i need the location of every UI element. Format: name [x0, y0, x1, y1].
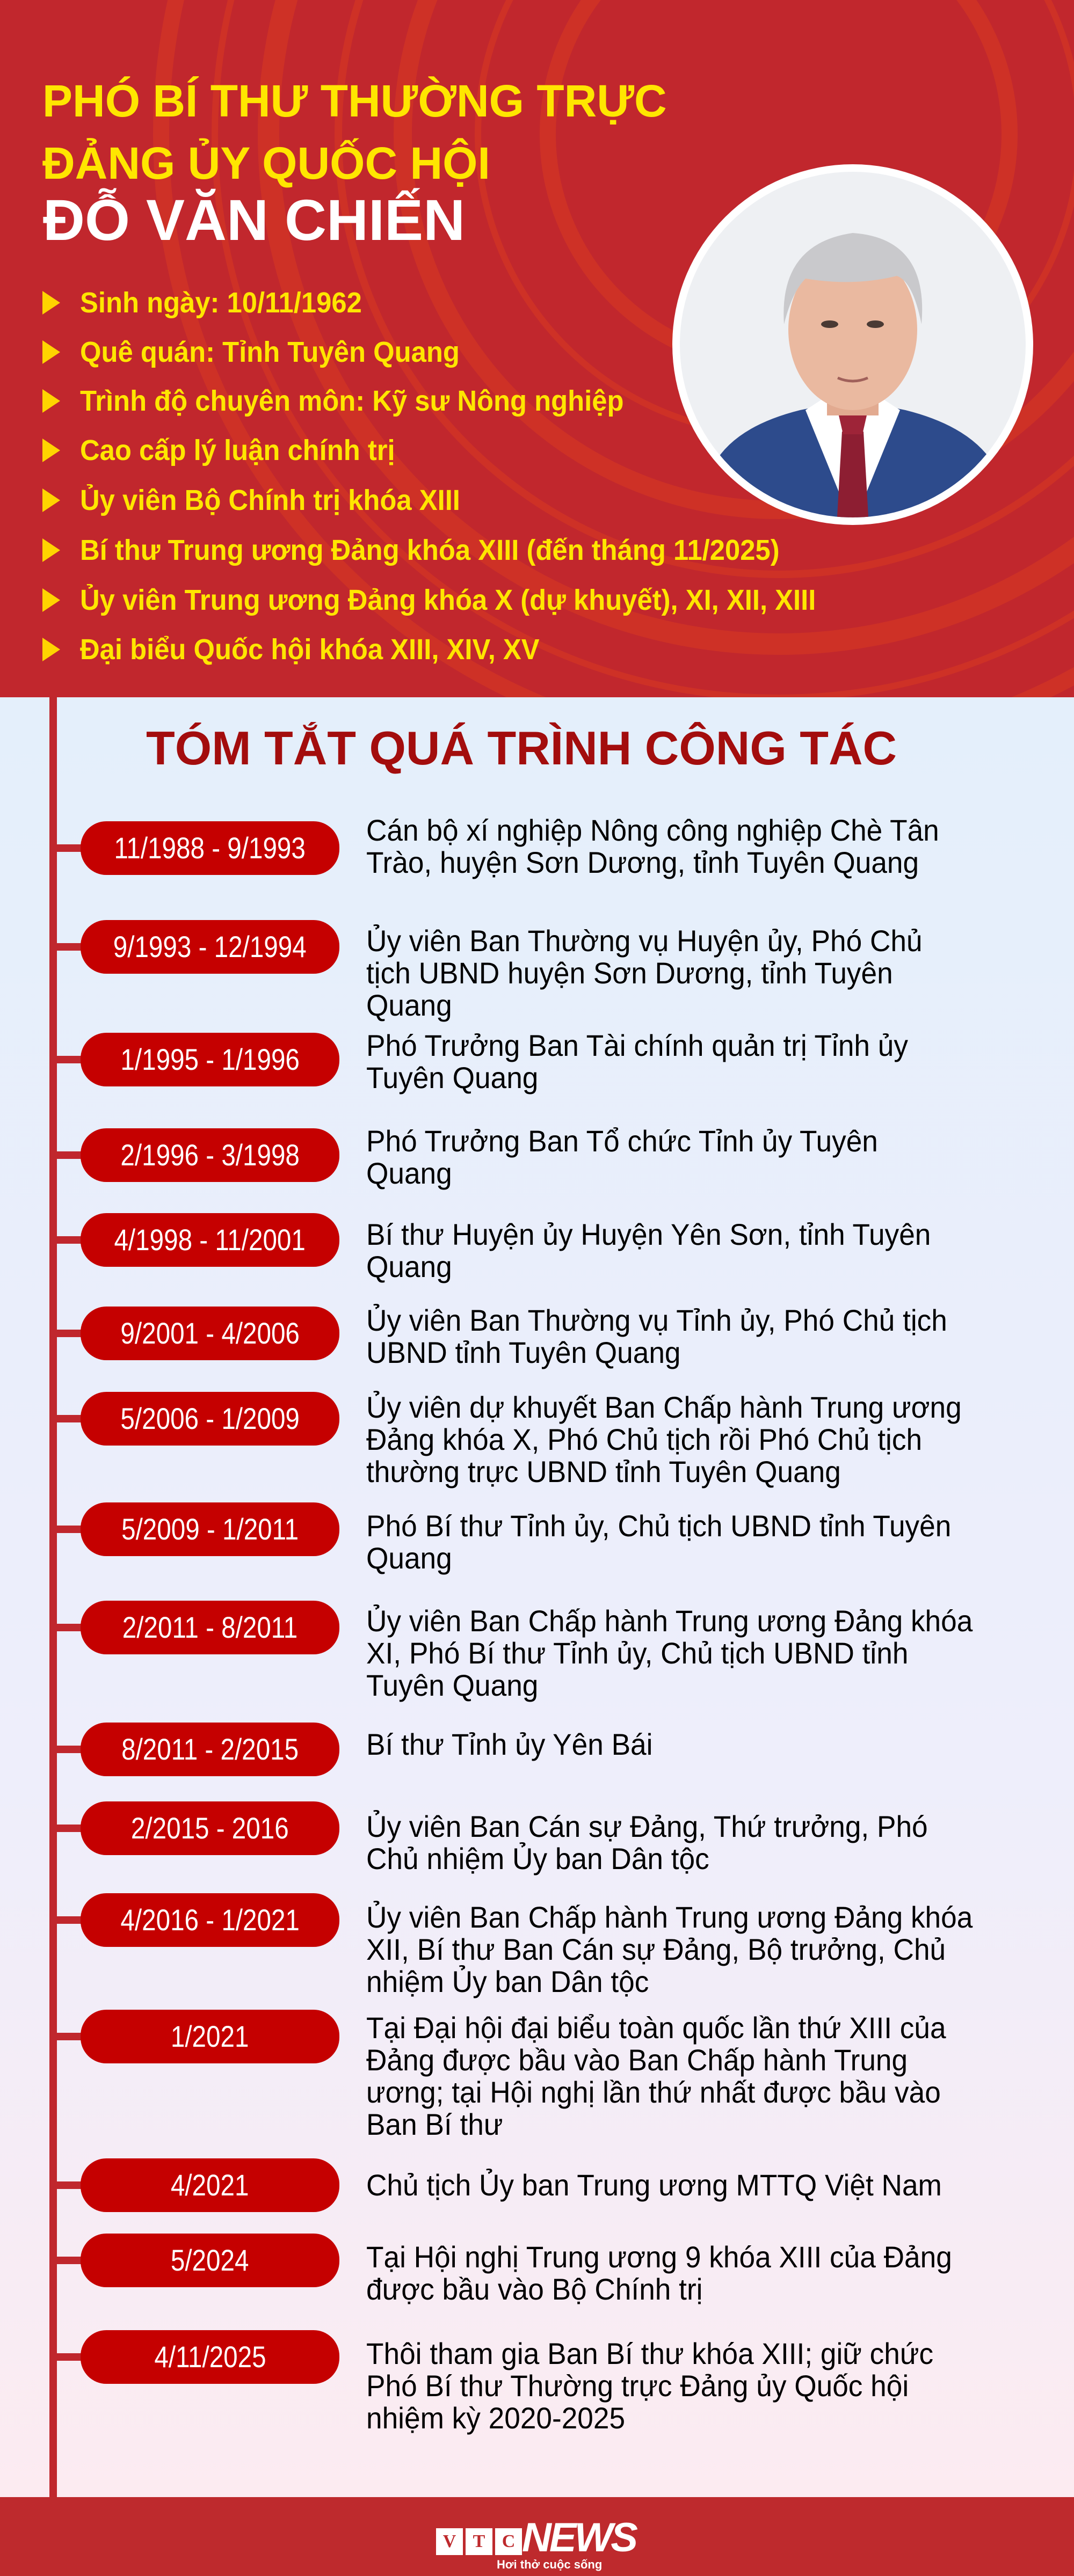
item 1: [57, 813, 939, 879]
item 4: [57, 1124, 878, 1190]
logo: VTC News: T: [473, 2531, 485, 2551]
title: ĐẢNG ỦY QUỐC HỘI: [42, 138, 490, 188]
bullet list: Cao cấp lý luận chính trị: [80, 434, 395, 466]
bullet list: Ủy viên Trung ương Đảng khóa X (dự khuyết), XI, XII, XIII: [80, 584, 816, 616]
header panel: [0, 0, 1074, 697]
logo: VTC News: Hơi thở cuộc sống: [497, 2558, 602, 2571]
item 8: Quang: [366, 1541, 452, 1575]
logo: VTC News: V: [443, 2531, 456, 2551]
item 15: được bầu vào Bộ Chính trị: [366, 2272, 702, 2306]
item 5: [57, 1213, 931, 1283]
item 10: [57, 1723, 652, 1776]
item 15: 5/2024: [171, 2243, 249, 2277]
item 6: Ủy viên Ban Thường vụ Tỉnh ủy, Phó Chủ tịch: [366, 1303, 947, 1337]
item 9: XI, Phó Bí thư Tỉnh ủy, Chủ tịch UBND tỉnh: [366, 1636, 908, 1670]
bullet list: Sinh ngày: 10/11/1962: [80, 287, 362, 319]
item 16: Phó Bí thư Thường trực Đảng ủy Quốc hội: [366, 2369, 909, 2403]
logo: VTC News: NEWS: [522, 2515, 636, 2560]
title: [42, 76, 667, 188]
item 2: Ủy viên Ban Thường vụ Huyện ủy, Phó Chủ: [366, 924, 923, 958]
item 9: 2/2011 - 8/2011: [122, 1610, 297, 1644]
item 8: [57, 1502, 951, 1575]
item 12: XII, Bí thư Ban Cán sự Đảng, Bộ trưởng, Chủ: [366, 1932, 946, 1966]
item 2: 9/1993 - 12/1994: [113, 930, 307, 964]
item 4: Phó Trưởng Ban Tổ chức Tỉnh ủy Tuyên: [366, 1124, 878, 1158]
item 5: 4/1998 - 11/2001: [114, 1223, 306, 1257]
title: PHÓ BÍ THƯ THƯỜNG TRỰC: [42, 76, 667, 126]
item 11: 2/2015 - 2016: [131, 1811, 289, 1845]
item 1: Cán bộ xí nghiệp Nông công nghiệp Chè Tân: [366, 813, 939, 847]
item 13: Tại Đại hội đại biểu toàn quốc lần thứ XIII của: [366, 2011, 946, 2045]
item 11: [57, 1801, 928, 1876]
item 4: 2/1996 - 3/1998: [120, 1138, 300, 1172]
bullet list: [42, 287, 816, 666]
item 15: [57, 2234, 952, 2306]
item 6: UBND tỉnh Tuyên Quang: [366, 1336, 681, 1369]
item 12: [57, 1893, 973, 1998]
item 14: Chủ tịch Ủy ban Trung ương MTTQ Việt Nam: [366, 2168, 942, 2202]
item 14: [57, 2158, 942, 2212]
item 13: Ban Bí thư: [366, 2107, 503, 2141]
item 13: 1/2021: [171, 2019, 249, 2053]
logo: VTC News: [436, 2515, 638, 2571]
item 9: Tuyên Quang: [366, 1668, 538, 1702]
item 16: [57, 2330, 933, 2435]
item 12: nhiệm Ủy ban Dân tộc: [366, 1965, 649, 1998]
timeline axis: [49, 697, 57, 2497]
item 3: [57, 1028, 908, 1094]
item 10: Bí thư Tỉnh ủy Yên Bái: [366, 1727, 652, 1761]
item 11: Ủy viên Ban Cán sự Đảng, Thứ trưởng, Phó: [366, 1809, 928, 1843]
item 6: 9/2001 - 4/2006: [120, 1316, 300, 1350]
item 14: 4/2021: [171, 2168, 249, 2202]
portrait: [672, 164, 1033, 525]
logo: VTC News: C: [502, 2531, 515, 2551]
item 2: [57, 920, 923, 1022]
item 12: 4/2016 - 1/2021: [120, 1903, 300, 1937]
item 7: [57, 1390, 962, 1488]
item 6: [57, 1303, 947, 1369]
item 16: Thôi tham gia Ban Bí thư khóa XIII; giữ chức: [366, 2337, 933, 2370]
item 5: Quang: [366, 1250, 452, 1283]
item 16: nhiệm kỳ 2020-2025: [366, 2401, 625, 2435]
item 7: thường trực UBND tỉnh Tuyên Quang: [366, 1455, 841, 1488]
item 3: Tuyên Quang: [366, 1061, 538, 1094]
item 13: ương; tại Hội nghị lần thứ nhất được bầu vào: [366, 2075, 941, 2109]
item 7: 5/2006 - 1/2009: [120, 1402, 300, 1435]
item 2: tịch UBND huyện Sơn Dương, tỉnh Tuyên: [366, 956, 893, 990]
item 10: 8/2011 - 2/2015: [121, 1732, 299, 1766]
item 5: Bí thư Huyện ủy Huyện Yên Sơn, tỉnh Tuyên: [366, 1217, 931, 1251]
item 4: Quang: [366, 1156, 452, 1190]
item 16: 4/11/2025: [154, 2340, 266, 2374]
bullet list: Ủy viên Bộ Chính trị khóa XIII: [80, 484, 460, 516]
item 12: Ủy viên Ban Chấp hành Trung ương Đảng khóa: [366, 1900, 973, 1934]
item 9: Ủy viên Ban Chấp hành Trung ương Đảng khóa: [366, 1604, 973, 1638]
item 3: 1/1995 - 1/1996: [120, 1042, 300, 1076]
bullet list: Đại biểu Quốc hội khóa XIII, XIV, XV: [80, 633, 540, 666]
item 7: Ủy viên dự khuyết Ban Chấp hành Trung ương: [366, 1390, 962, 1424]
item 7: Đảng khóa X, Phó Chủ tịch rồi Phó Chủ tịch: [366, 1422, 922, 1456]
timeline heading: TÓM TẮT QUÁ TRÌNH CÔNG TÁC: [146, 721, 897, 775]
footer: [0, 2497, 1074, 2576]
item 3: Phó Trưởng Ban Tài chính quản trị Tỉnh ủy: [366, 1028, 908, 1062]
bullet list: Bí thư Trung ương Đảng khóa XIII (đến tháng 11/2025): [80, 534, 780, 566]
item 1: Trào, huyện Sơn Dương, tỉnh Tuyên Quang: [366, 845, 919, 879]
item 11: Chủ nhiệm Ủy ban Dân tộc: [366, 1842, 709, 1876]
bullet list: Quê quán: Tỉnh Tuyên Quang: [80, 336, 460, 368]
bullet list: Trình độ chuyên môn: Kỹ sư Nông nghiệp: [80, 385, 623, 417]
item 2: Quang: [366, 988, 452, 1022]
item 8: 5/2009 - 1/2011: [121, 1512, 299, 1546]
item 13: Đảng được bầu vào Ban Chấp hành Trung: [366, 2043, 908, 2077]
item 15: Tại Hội nghị Trung ương 9 khóa XIII của Đảng: [366, 2240, 952, 2274]
item 8: Phó Bí thư Tỉnh ủy, Chủ tịch UBND tỉnh Tuyên: [366, 1509, 951, 1543]
item 9: [57, 1601, 973, 1702]
name: ĐỖ VĂN CHIẾN: [43, 187, 465, 252]
timeline panel: [0, 697, 1074, 2497]
item 13: [57, 2010, 946, 2141]
item 1: 11/1988 - 9/1993: [114, 831, 306, 865]
